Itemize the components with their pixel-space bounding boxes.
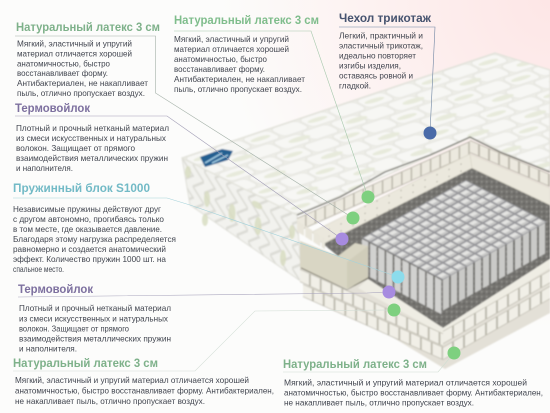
text: latex 2: материал отличается хорошей [174, 44, 289, 54]
text: latex 4: Мягкий, эластичный и упругий материал отличается хорошей [284, 378, 527, 388]
spring tops [362, 180, 547, 280]
dotted latex right strip [470, 154, 550, 205]
text: thermal felt 2: волокон. Защищает от прямого [19, 324, 129, 334]
felt base [323, 165, 550, 328]
text: thermal felt 2 [19, 303, 171, 354]
text: cover: изгибы изделия, [339, 60, 401, 70]
text: thermal felt 1: из смеси искусственных и натуральных [16, 133, 167, 143]
text: latex 2: Антибактериален, не накапливает [174, 74, 305, 84]
heading: latex 1: Натуральный латекс 3 см [16, 20, 160, 34]
cover cut edge [297, 137, 550, 215]
text: latex 3: анатомичностью, быстро восстанавливает форму. Антибактериален, [15, 386, 274, 396]
bottom latex base [300, 259, 550, 369]
text: latex 2: пыль, отлично пропускает воздух. [174, 84, 302, 94]
text: cover [339, 30, 423, 90]
leader lines [13, 27, 454, 372]
upper top strip [358, 259, 550, 334]
text: spring block: спальное место. [13, 264, 64, 274]
side face of cover [182, 158, 302, 282]
text: spring block: Благодаря этому нагрузка распределяется [13, 234, 176, 244]
text: spring block: Независимые пружины действуют друг [13, 204, 161, 214]
text: thermal felt 2: Плотный и прочный нетканый материал [19, 303, 171, 313]
text: thermal felt 1 [16, 123, 169, 173]
text: latex 1: восстанавливает форму. [17, 68, 108, 78]
text: spring block [13, 204, 176, 274]
text: cover: эластичный трикотаж, [339, 40, 423, 50]
upper cell row left [300, 269, 443, 346]
text: latex 2: Мягкий, эластичный и упругий [174, 34, 289, 44]
upper cell row right [443, 270, 550, 344]
top cover [182, 53, 550, 215]
front end of latex layers [297, 226, 325, 244]
heading: thermal felt 1: Термовойлок [15, 101, 91, 115]
text: latex 3: не накапливает пыль, отлично пропускает воздух. [15, 396, 205, 406]
text: latex 4: не накапливает пыль, отлично пропускает воздух. [284, 398, 474, 408]
text: cover: оставаясь ровной и [339, 70, 413, 80]
text: latex 3 [15, 375, 274, 406]
text: thermal felt 1: Плотный и прочный нетканый материал [16, 123, 169, 133]
text: thermal felt 1: волокон. Защищает от прямого [16, 143, 135, 153]
top latex right row [470, 140, 550, 187]
text: latex 1: пыль, отлично пропускает воздух. [17, 88, 145, 98]
text: cover: идеально повторяет [339, 50, 416, 60]
top latex left row [297, 141, 470, 232]
brand logo [200, 149, 233, 167]
heading: latex 2: Натуральный латекс 3 см [174, 13, 319, 27]
text: latex 4 [284, 378, 543, 408]
bamboo leaves on side [185, 166, 295, 266]
spring right face [443, 237, 547, 295]
text: thermal felt 1: взаимодействия металлических пружин [16, 153, 168, 163]
text: latex 1: материал отличается хорошей [17, 48, 132, 58]
dotted latex left strip [312, 154, 472, 244]
text: latex 2: восстанавливает форму. [174, 64, 265, 74]
text: thermal felt 2: взаимодействия металлических пружин [19, 334, 171, 344]
text: latex 3: Мягкий, эластичный и упругий материал отличается хорошей [15, 375, 249, 385]
heading: thermal felt 2: Термовойлок [18, 282, 94, 296]
text: latex 2 [174, 34, 305, 94]
text: spring block: с другом автономно, прогибаясь только [13, 214, 164, 224]
heading: latex 3: Натуральный латекс 3 см [13, 356, 158, 370]
heading: spring block: Пружинный блок S1000 [13, 181, 150, 195]
spring left face [362, 256, 443, 298]
heading: latex 4: Натуральный латекс 3 см [283, 357, 427, 371]
text: latex 2: анатомичностью, быстро [174, 54, 267, 64]
text: spring block: в том месте, где оказывается давление. [13, 224, 162, 234]
marker dots [336, 126, 460, 360]
text: cover: гладкой. [339, 80, 371, 90]
text: spring block: равномерно и создается анатомический [13, 244, 166, 254]
text: latex 1: Антибактериален, не накапливает [17, 78, 148, 88]
foam block [300, 241, 368, 290]
text: thermal felt 2: и наполнителя. [19, 344, 77, 354]
text: thermal felt 1: и наполнителя. [16, 163, 73, 173]
lower cell row left [303, 284, 443, 360]
lower cell row right [443, 286, 550, 360]
text: latex 4: анатомичностью, быстро восстанавливает форму. Антибактериален, [284, 388, 543, 398]
heading: cover: Чехол трикотаж [339, 11, 431, 25]
text: thermal felt 2: из смеси искусственных и натуральных [19, 314, 169, 324]
text: latex 1 [17, 38, 148, 98]
mattress [182, 53, 550, 369]
text: latex 1: Мягкий, эластичный и упругий [17, 38, 132, 48]
text: spring block: эффект. Количество пружин 1000 шт. на [13, 254, 166, 264]
text: cover: Легкий, практичный и [339, 30, 423, 40]
text: latex 1: анатомичностью, быстро [17, 58, 110, 68]
